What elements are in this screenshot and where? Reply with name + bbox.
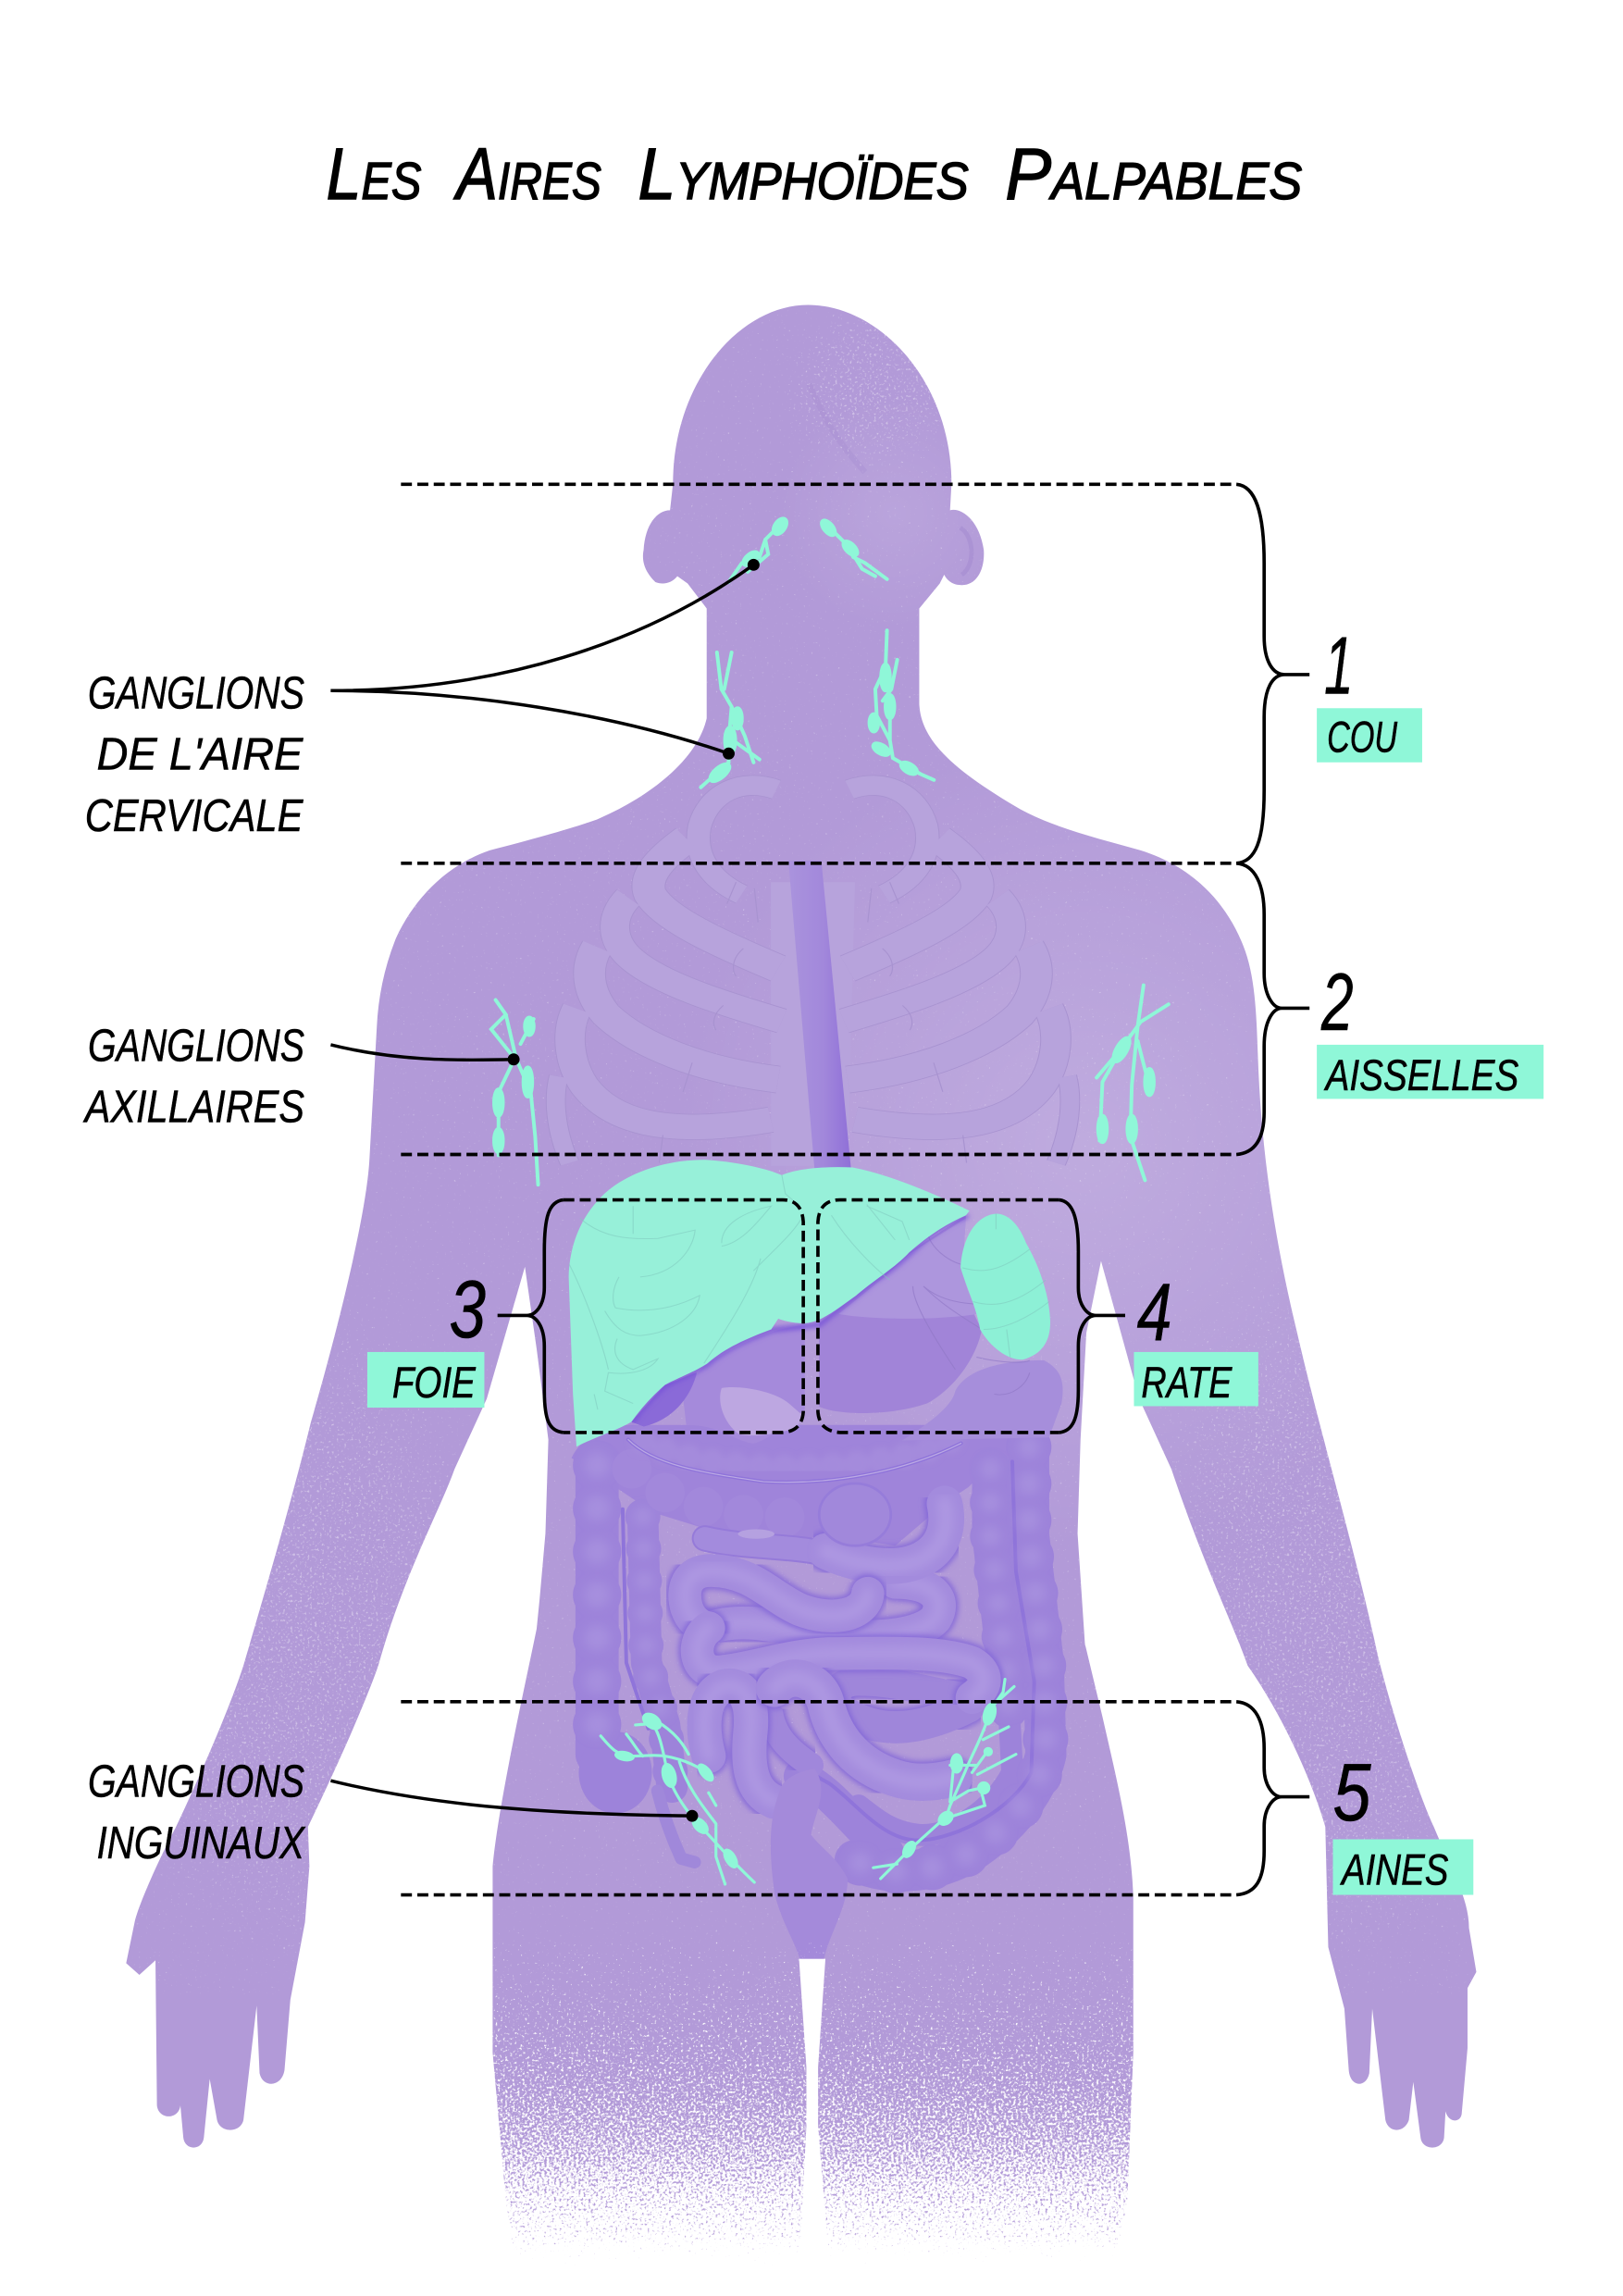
callout 5 groin	[1332, 1746, 1473, 1895]
rib cage and clavicles	[556, 786, 1070, 1173]
label: cervical nodes	[85, 668, 304, 841]
lymph nodes: neck	[700, 516, 934, 788]
zone 2 armpits: dashed line and brace	[401, 863, 1309, 1155]
lymph nodes: armpits	[491, 986, 1169, 1185]
stomach, pancreas and spleen-side colon	[631, 1215, 1063, 1444]
label: inguinal nodes: INGUINAUX	[96, 1818, 306, 1868]
callout 4 spleen	[1134, 1266, 1258, 1408]
liver and spleen	[569, 1160, 1050, 1446]
callout 2 armpits: 2	[1320, 956, 1354, 1048]
large intestine	[572, 1425, 1046, 1959]
label: inguinal nodes: GANGLIONS	[88, 1757, 304, 1807]
zone 5 groin: dashed lines and brace	[401, 1702, 1309, 1895]
label: cervical nodes: GANGLIONS	[88, 668, 304, 718]
title: LES	[327, 132, 421, 215]
callout 2 armpits: AISSELLES	[1323, 1051, 1519, 1100]
label: cervical nodes: CERVICALE	[85, 791, 304, 841]
callout 4 spleen: 4	[1137, 1266, 1172, 1358]
callout 1 neck	[1317, 619, 1422, 763]
label: cervical nodes: DE L'AIRE	[96, 730, 304, 780]
rectum	[771, 1769, 848, 1959]
skin grain on arms and head	[88, 301, 1525, 1994]
label: axillary nodes: GANGLIONS	[88, 1021, 304, 1071]
lymph nodes: groin	[601, 1680, 1016, 1884]
appendix	[657, 1791, 695, 1862]
title: AIRES	[453, 132, 601, 215]
callout 3 liver: 3	[449, 1263, 486, 1355]
zone 4 spleen: dashed box and brace	[818, 1200, 1125, 1433]
esophagus	[788, 861, 851, 1173]
label: axillary nodes: AXILLAIRES	[82, 1083, 304, 1133]
label: inguinal nodes	[88, 1757, 306, 1868]
zone 3 liver: dashed box and brace	[498, 1200, 803, 1433]
label: axillary nodes	[82, 1021, 304, 1133]
callout 4 spleen: RATE	[1141, 1359, 1233, 1408]
leader lines	[330, 561, 758, 1820]
liver shadow edge	[631, 1216, 968, 1422]
leg grain fade	[477, 1942, 1158, 2296]
callout 1 neck: COU	[1327, 714, 1398, 763]
callout 5 groin: AINES	[1340, 1845, 1449, 1894]
spleen	[960, 1214, 1050, 1359]
annotations layer	[82, 132, 1543, 1895]
callout 2 armpits	[1317, 956, 1543, 1100]
omentum flap	[819, 1483, 891, 1545]
callout 1 neck: 1	[1324, 619, 1354, 711]
liver	[569, 1160, 970, 1446]
callout 3 liver	[367, 1263, 486, 1408]
title: PALPABLES	[1005, 132, 1302, 215]
callout 5 groin: 5	[1332, 1746, 1371, 1838]
title: LYMPHOÏDES	[638, 132, 969, 215]
title	[327, 132, 1302, 215]
zone 1 neck: dashed lines and brace	[401, 484, 1309, 863]
small intestine	[685, 1504, 985, 1802]
callout 3 liver: FOIE	[392, 1359, 477, 1408]
